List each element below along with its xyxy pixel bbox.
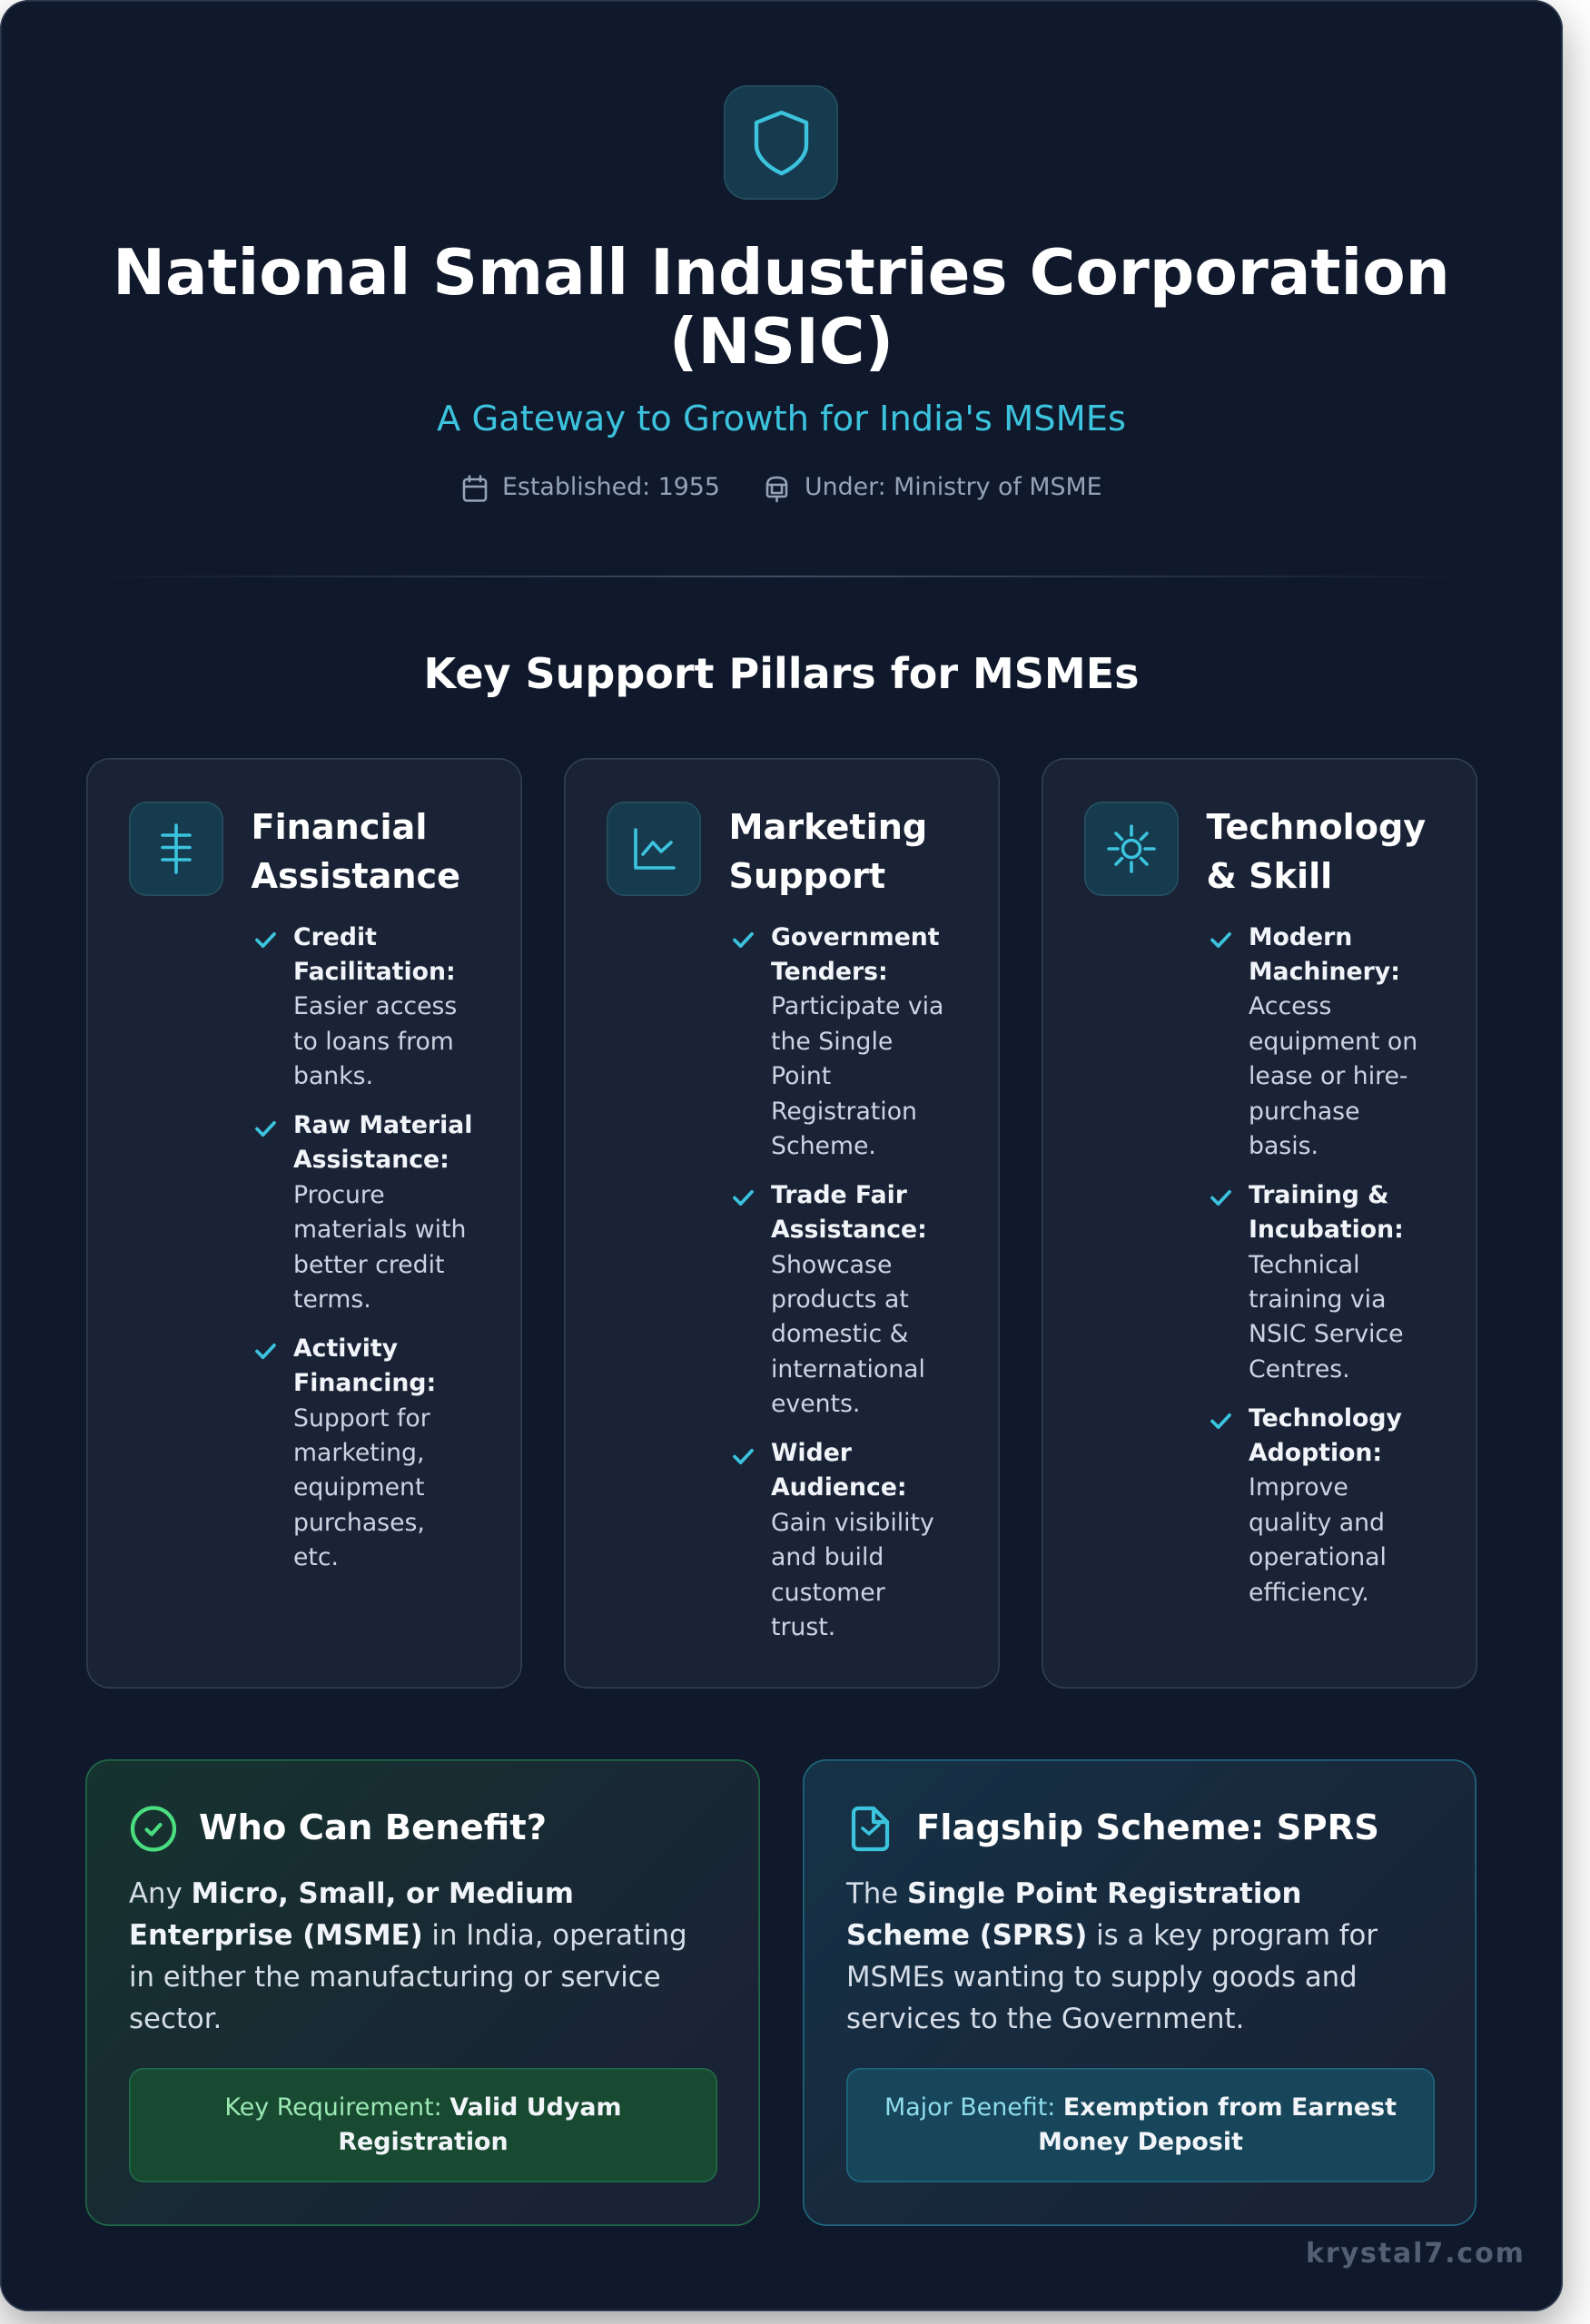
- list item: raw material assistance: materials with: [293, 1216, 466, 1244]
- watermark: krystal7.com: [1306, 2237, 1526, 2270]
- panel: financial assistance: [86, 758, 521, 1689]
- list item: wider audience: Audience:: [771, 1473, 907, 1502]
- list item: wider audience: [733, 1439, 934, 1641]
- list item: activity financing: etc.: [293, 1543, 339, 1571]
- card heading: & Skill: [1206, 857, 1332, 897]
- list item: training and incubation: [1210, 1181, 1404, 1384]
- list item: activity financing: [255, 1334, 436, 1571]
- card heading: [251, 808, 460, 897]
- list item: modern machinery: Modern: [1249, 923, 1352, 951]
- list item: modern machinery: lease or hire-: [1249, 1062, 1408, 1090]
- list item: trade fair assistance: products at: [771, 1285, 909, 1314]
- scheme description: [846, 1877, 1378, 2035]
- list item: activity financing: purchases,: [293, 1509, 425, 1537]
- callout: key requirement: [129, 2068, 717, 2182]
- list item: activity financing: Support for: [293, 1404, 430, 1433]
- panel heading: Who Can Benefit?: [199, 1807, 547, 1848]
- section divider: [82, 576, 1480, 577]
- list item: raw material assistance: better credit: [293, 1251, 444, 1279]
- list item: activity financing: Activity: [293, 1334, 398, 1363]
- panel heading: Flagship Scheme: SPRS: [916, 1807, 1379, 1848]
- card heading: Support: [728, 857, 885, 897]
- list item: technology adoption: Adoption:: [1249, 1439, 1382, 1467]
- list item: wider audience: Gain visibility: [771, 1509, 934, 1537]
- list item: technology adoption: [1210, 1404, 1402, 1607]
- list item: modern machinery: Machinery:: [1249, 958, 1400, 986]
- icon: finance: [129, 802, 223, 896]
- parent ministry: Under: Ministry of MSME: [805, 472, 1102, 501]
- eligibility text: Enterprise (MSME) in India, operating: [129, 1919, 687, 1952]
- list item: wider audience: customer: [771, 1579, 885, 1607]
- title: (NSIC): [669, 306, 894, 379]
- icon: document check: [852, 1807, 890, 1852]
- list item: training and incubation: Incubation:: [1249, 1216, 1404, 1244]
- callout: major benefit: Money Deposit: [1038, 2128, 1243, 2156]
- scheme description: MSMEs wanting to supply goods and: [846, 1961, 1358, 1994]
- list item: technology adoption: quality and: [1249, 1509, 1385, 1537]
- list item: wider audience: Wider: [771, 1439, 852, 1467]
- list item: credit facilitation: to loans from: [293, 1028, 454, 1056]
- list item: modern machinery: Access: [1249, 992, 1331, 1020]
- card heading: Marketing: [728, 808, 927, 848]
- feature list: [1210, 923, 1417, 1607]
- list item: government tenders: Registration: [771, 1098, 917, 1126]
- list item: credit facilitation: Credit: [293, 923, 377, 951]
- icon: ministry building: [766, 476, 788, 503]
- list item: training and incubation: NSIC Service: [1249, 1320, 1404, 1348]
- list item: activity financing: Financing:: [293, 1369, 436, 1397]
- list item: technology adoption: efficiency.: [1249, 1579, 1369, 1607]
- list item: modern machinery: basis.: [1249, 1132, 1318, 1160]
- icon: shield badge: [724, 85, 838, 200]
- list item: wider audience: and build: [771, 1543, 884, 1571]
- list item: raw material assistance: Procure: [293, 1181, 385, 1209]
- list item: training and incubation: Training &: [1249, 1181, 1388, 1209]
- list item: credit facilitation: [255, 923, 457, 1090]
- list item: government tenders: Government: [771, 923, 940, 951]
- panel: flagship scheme: [803, 1759, 1476, 2226]
- scheme description: Scheme (SPRS) is a key program for: [846, 1919, 1378, 1952]
- eligibility text: Any Micro, Small, or Medium: [129, 1877, 574, 1910]
- icon: green check circle: [131, 1806, 176, 1852]
- list item: credit facilitation: Facilitation:: [293, 958, 456, 986]
- list item: raw material assistance: Assistance:: [293, 1146, 449, 1174]
- icon: calendar: [463, 475, 487, 502]
- scheme description: services to the Government.: [846, 2003, 1244, 2035]
- list item: government tenders: Participate via: [771, 992, 943, 1020]
- eligibility text: [129, 1877, 687, 2035]
- callout: major benefit: Major Benefit: Exemption from Earnest: [884, 2093, 1397, 2121]
- card heading: Assistance: [251, 857, 460, 897]
- panel: who can benefit: [85, 1759, 760, 2226]
- list item: wider audience: trust.: [771, 1613, 835, 1641]
- list item: activity financing: equipment: [293, 1473, 424, 1502]
- eligibility text: sector.: [129, 2003, 222, 2035]
- list item: modern machinery: [1210, 923, 1417, 1160]
- card heading: Technology: [1206, 808, 1426, 848]
- icon: sun gear: [1084, 802, 1179, 896]
- list item: modern machinery: purchase: [1249, 1098, 1360, 1126]
- list item: government tenders: Point: [771, 1062, 831, 1090]
- list item: raw material assistance: terms.: [293, 1285, 371, 1314]
- title: National Small Industries Corporation: [113, 237, 1450, 310]
- list item: government tenders: [733, 923, 943, 1160]
- list item: raw material assistance: Raw Material: [293, 1111, 472, 1139]
- list item: government tenders: the Single: [771, 1028, 893, 1056]
- card heading: Financial: [251, 808, 427, 848]
- established date: Established: 1955: [502, 472, 720, 501]
- list item: training and incubation: Technical: [1249, 1251, 1360, 1279]
- eligibility text: in either the manufacturing or service: [129, 1961, 661, 1994]
- icon: line chart: [607, 802, 701, 896]
- list item: technology adoption: Technology: [1249, 1404, 1402, 1433]
- panel: marketing support: [564, 758, 999, 1689]
- list item: trade fair assistance: events.: [771, 1390, 860, 1418]
- callout: key requirement: Key Requirement: Valid Udyam: [224, 2093, 622, 2121]
- list item: trade fair assistance: domestic &: [771, 1320, 908, 1348]
- list item: trade fair assistance: [733, 1181, 927, 1418]
- heading: key support pillars: Key Support Pillars for MSMEs: [423, 648, 1139, 697]
- list item: trade fair assistance: international: [771, 1355, 925, 1384]
- feature list: [733, 923, 943, 1641]
- list item: technology adoption: operational: [1249, 1543, 1387, 1571]
- card heading: [1206, 808, 1426, 897]
- list item: trade fair assistance: Showcase: [771, 1251, 892, 1279]
- list item: credit facilitation: Easier access: [293, 992, 457, 1020]
- list item: government tenders: Scheme.: [771, 1132, 876, 1160]
- list item: government tenders: Tenders:: [771, 958, 888, 986]
- list item: trade fair assistance: Assistance:: [771, 1216, 927, 1244]
- list item: activity financing: marketing,: [293, 1439, 424, 1467]
- panel: technology and skill: [1042, 758, 1476, 1689]
- callout: key requirement: Registration: [338, 2128, 509, 2156]
- feature list: [255, 923, 472, 1571]
- list item: technology adoption: Improve: [1249, 1473, 1348, 1502]
- scheme description: The Single Point Registration: [846, 1877, 1301, 1910]
- card heading: [728, 808, 927, 897]
- list item: training and incubation: Centres.: [1249, 1355, 1350, 1384]
- list item: training and incubation: training via: [1249, 1285, 1386, 1314]
- list item: credit facilitation: banks.: [293, 1062, 373, 1090]
- list item: raw material assistance: [255, 1111, 472, 1314]
- callout: major benefit: [846, 2068, 1435, 2182]
- list item: modern machinery: equipment on: [1249, 1028, 1417, 1056]
- subtitle: A Gateway to Growth for India's MSMEs: [437, 399, 1126, 439]
- list item: trade fair assistance: Trade Fair: [771, 1181, 907, 1209]
- title: [113, 237, 1450, 379]
